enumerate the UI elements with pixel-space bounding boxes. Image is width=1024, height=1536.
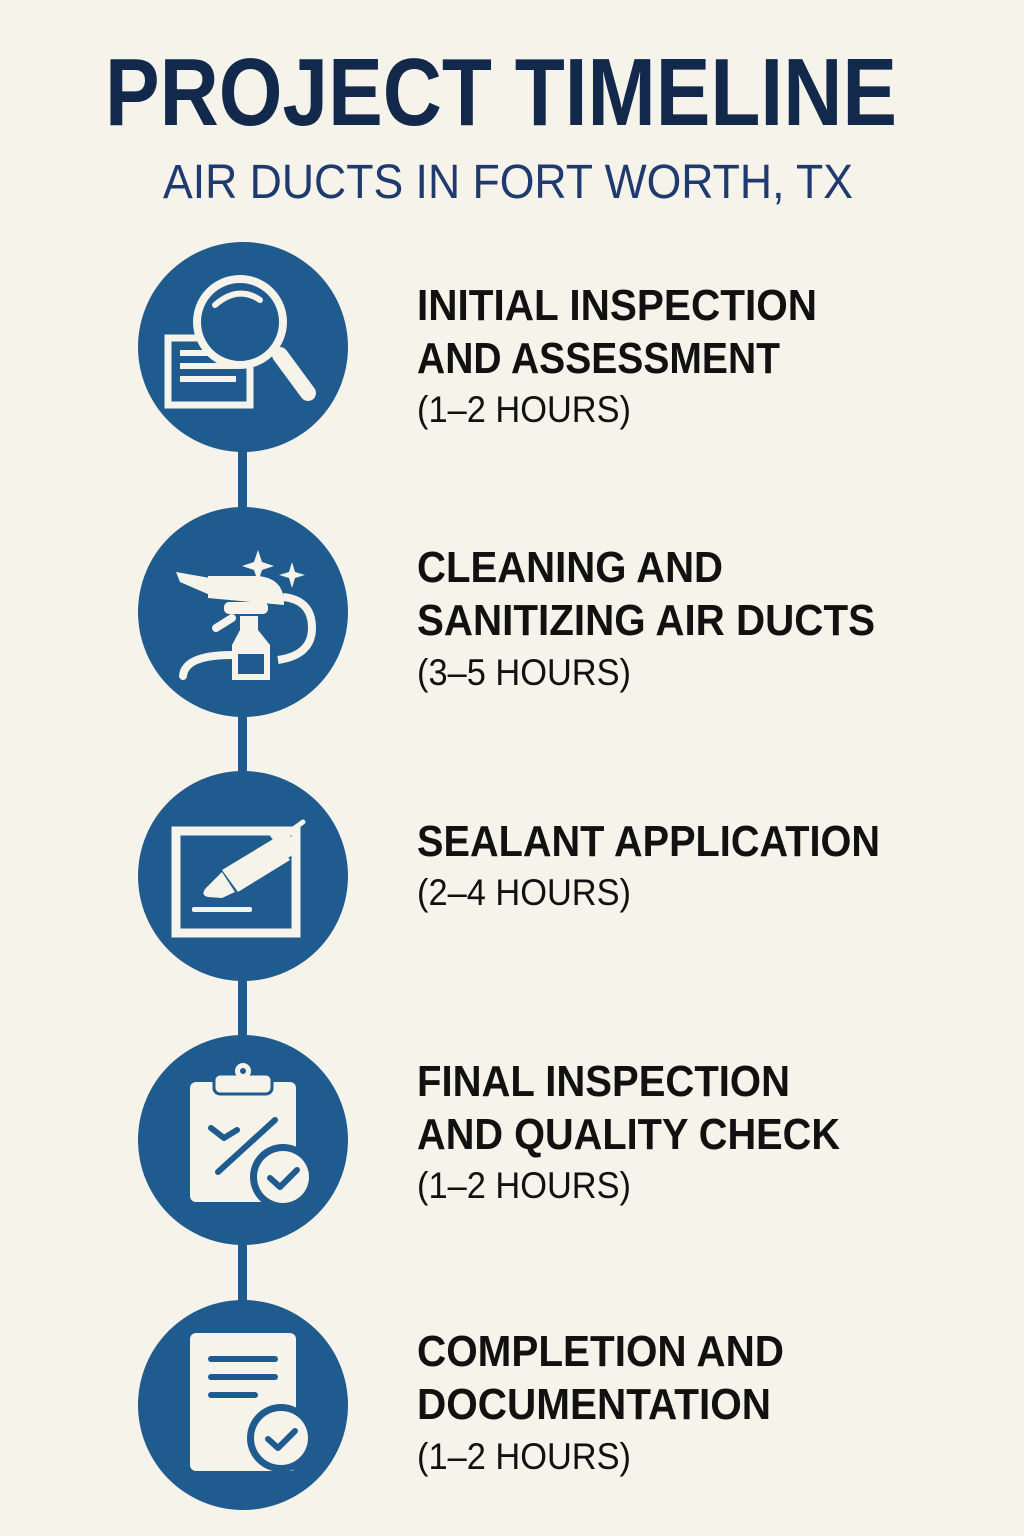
icon: cleaning — [138, 507, 348, 717]
step 2 text: SANITIZING AIR DUCTS — [417, 596, 875, 645]
step 1 text: AND ASSESSMENT — [417, 334, 780, 383]
step 4 text: (1–2 HOURS) — [417, 1165, 631, 1206]
step 2 text: CLEANING AND — [417, 543, 723, 592]
step 4 text: FINAL INSPECTION — [417, 1057, 790, 1106]
step 5 text: (1–2 HOURS) — [417, 1436, 631, 1477]
step 1 — [138, 242, 817, 452]
step 1 text: INITIAL INSPECTION — [417, 281, 817, 330]
step 4 — [138, 1035, 840, 1245]
icon: inspection — [138, 242, 348, 452]
step 2 — [138, 507, 875, 717]
timeline connector — [238, 440, 247, 1320]
step 2 text: (3–5 HOURS) — [417, 652, 631, 693]
step 3 text: (2–4 HOURS) — [417, 872, 631, 913]
step 5 text — [417, 1327, 784, 1477]
step 1 text: (1–2 HOURS) — [417, 389, 631, 430]
step 2 text — [417, 543, 875, 693]
icon: quality check — [138, 1035, 348, 1245]
step 4 text: AND QUALITY CHECK — [417, 1110, 840, 1159]
step 5 text: DOCUMENTATION — [417, 1380, 771, 1429]
step 3 — [138, 771, 880, 981]
step 5 text: COMPLETION AND — [417, 1327, 784, 1376]
title: PROJECT TIMELINE — [105, 39, 897, 146]
step 1 text — [417, 281, 817, 430]
step 3 text — [417, 817, 880, 913]
icon: documentation — [138, 1300, 348, 1510]
step 4 text — [417, 1057, 840, 1206]
icon: sealant — [138, 771, 348, 981]
subtitle: AIR DUCTS IN FORT WORTH, TX — [163, 156, 853, 209]
step 3 text: SEALANT APPLICATION — [417, 817, 880, 866]
step 5 — [138, 1300, 784, 1510]
